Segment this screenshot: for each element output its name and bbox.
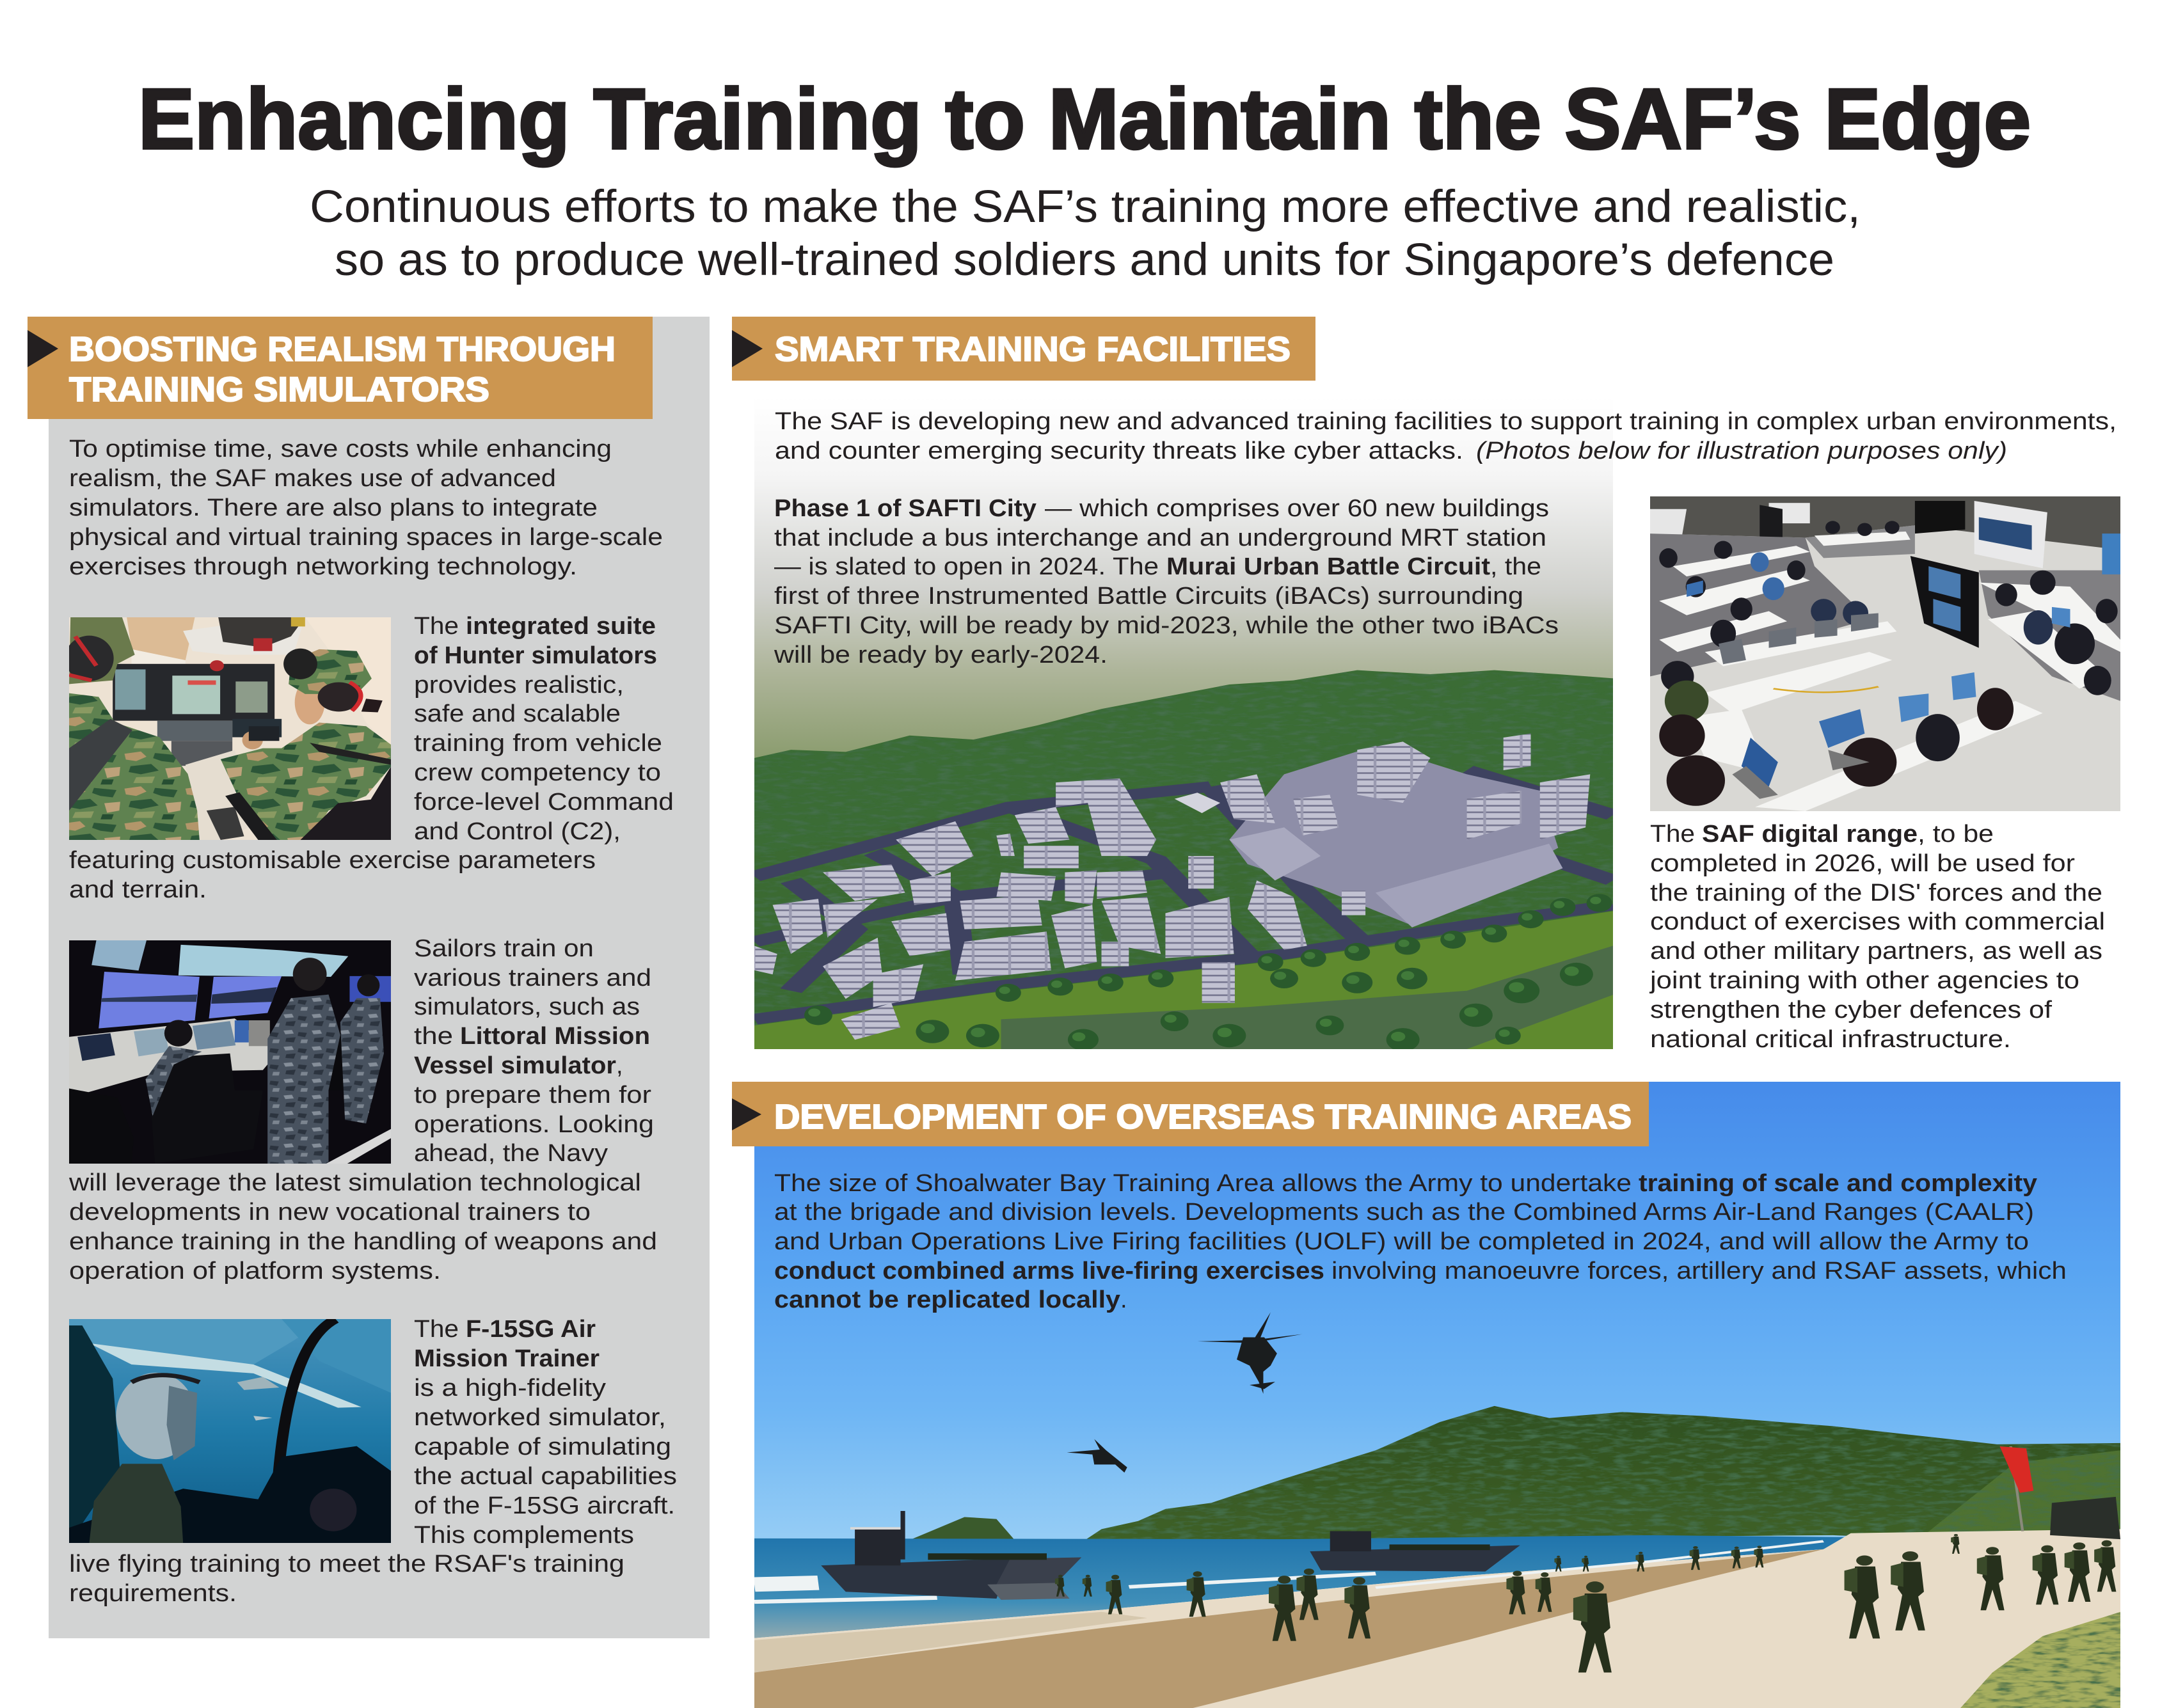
attack helicopter large — [1198, 1312, 1303, 1394]
landing craft centre — [1310, 1531, 1520, 1572]
text: Littoral Mission Vessel simulator: Vessel simulator — [414, 1052, 616, 1079]
text: overseas training areas: at the brigade and division levels. Developments such as the Combined Arms Air-Land Ranges (CAALR) — [774, 1199, 2034, 1226]
text: Phase 1 of SAFTI City: , the — [1490, 553, 1541, 580]
island — [910, 1517, 1015, 1541]
photo: Littoral Mission Vessel simulator — [69, 940, 391, 1164]
text: F-15SG Air Mission Trainer: is a high-fidelity — [414, 1375, 606, 1402]
photo: SAF digital range operations room — [1650, 496, 2120, 811]
text: Littoral Mission Vessel simulator: operations. Looking — [414, 1111, 654, 1138]
text: SAF digital range: joint training with other agencies to — [1649, 967, 2079, 994]
intro paragraph: simulators. There are also plans to integrate — [69, 494, 598, 521]
text: Littoral Mission Vessel simulator: simulators, such as — [414, 993, 640, 1020]
foreground trees — [804, 894, 1612, 1052]
intro paragraph — [69, 436, 663, 580]
crowded right desks zone — [1979, 571, 2120, 701]
attack helicopter small — [1067, 1439, 1127, 1473]
truck — [2050, 1497, 2120, 1539]
text: SAF digital range: strengthen the cyber defences of — [1650, 997, 2053, 1024]
text: Phase 1 of SAFTI City: Phase 1 of SAFTI City — [774, 495, 1037, 522]
soldiers — [1055, 1534, 2116, 1672]
surf foam — [754, 1541, 1823, 1602]
landing craft left — [821, 1511, 1081, 1600]
text: SAF digital range: the training of the DIS' forces and the — [1650, 880, 2102, 906]
text: Phase 1 of SAFTI City: that include a bus interchange and an underground MRT station — [774, 525, 1546, 551]
text: SAF digital range: national critical infrastructure. — [1650, 1026, 2011, 1053]
section header: development of overseas training areas: DEVELOPMENT OF OVERSEAS TRAINING AREAS — [774, 1098, 1632, 1136]
text: F-15SG Air Mission Trainer: networked simulator, — [414, 1404, 666, 1431]
text: SAF digital range — [1649, 821, 2105, 1053]
intro paragraph: exercises through networking technology. — [69, 553, 577, 580]
text: Hunter simulators: and terrain. — [69, 876, 207, 903]
section header: boosting realism — [28, 317, 653, 419]
section header: boosting realism: BOOSTING REALISM THROUGH — [69, 330, 616, 368]
text: F-15SG Air Mission Trainer: capable of simulating — [414, 1434, 671, 1460]
subtitle: Continuous efforts to make the SAF’s training more effective and realistic, — [310, 182, 1861, 232]
text: Hunter simulators: and Control (C2), — [414, 818, 621, 845]
text: F-15SG Air Mission Trainer: live flying training to meet the RSAF's training — [69, 1551, 624, 1578]
roads — [754, 770, 1613, 1019]
text: Phase 1 of SAFTI City: — which comprises over 60 new buildings — [1045, 495, 1549, 522]
text: Phase 1 of SAFTI City — [774, 495, 1559, 668]
text: Littoral Mission Vessel simulator: Littoral Mission — [460, 1023, 650, 1050]
text: F-15SG Air Mission Trainer — [69, 1316, 677, 1607]
text: Littoral Mission Vessel simulator: Sailors train on — [414, 935, 594, 962]
mountain — [1083, 1406, 2120, 1547]
text: Hunter simulators: training from vehicle — [414, 730, 662, 757]
text: smart training facilities intro: (Photos below for illustration purposes only) — [1476, 438, 2007, 464]
text: overseas training areas: and Urban Operations Live Firing facilities (UOLF) will be completed in 2024, and will allow the Army to — [774, 1228, 2029, 1255]
photo: Hunter simulator crew — [69, 617, 391, 840]
panel: boosting realism through training simulators — [28, 317, 710, 1638]
text: Littoral Mission Vessel simulator: various trainers and — [414, 965, 651, 992]
image: SAFTI City aerial render — [754, 460, 1613, 1049]
central building complex — [1175, 734, 1590, 950]
text: Littoral Mission Vessel simulator: enhance training in the handling of weapons and — [69, 1228, 657, 1255]
text: overseas training areas: cannot be replicated locally — [774, 1286, 1120, 1313]
section header: smart training facilities — [732, 317, 1315, 381]
text: Hunter simulators: safe and scalable — [414, 700, 621, 727]
text: Hunter simulators: featuring customisable exercise parameters — [69, 847, 596, 874]
seated people — [1659, 521, 2118, 806]
intro paragraph: To optimise time, save costs while enhancing — [69, 436, 612, 463]
text: Littoral Mission Vessel simulator — [68, 935, 657, 1285]
text: SAF digital range: The — [1650, 821, 1695, 848]
text: overseas training areas: The size of Shoalwater Bay Training Area allows the Army to undertake — [774, 1170, 1632, 1197]
text: overseas training areas: involving manoeuvre forces, artillery and RSAF assets, which — [1331, 1258, 2067, 1285]
text: overseas training areas: . — [1120, 1286, 1127, 1313]
text: Phase 1 of SAFTI City: SAFTI City, will be ready by mid-2023, while the other two iBACs — [774, 612, 1559, 639]
text: Hunter simulators: integrated suite — [466, 613, 656, 640]
title: Enhancing Training to Maintain the SAF’s Edge — [138, 72, 2031, 167]
text: Hunter simulators: crew competency to — [414, 759, 661, 786]
subtitle: so as to produce well-trained soldiers and units for Singapore’s defence — [335, 235, 1834, 285]
beach grass — [1960, 1612, 2120, 1708]
foreground grass and pond — [754, 911, 1613, 1049]
text: Littoral Mission Vessel simulator: will leverage the latest simulation technological — [68, 1169, 641, 1196]
text: F-15SG Air Mission Trainer: F-15SG Air — [466, 1316, 596, 1343]
text: F-15SG Air Mission Trainer: Mission Trainer — [414, 1345, 600, 1372]
text: smart training facilities intro: and counter emerging security threats like cyber attacks. — [775, 438, 1463, 464]
text: overseas training areas — [774, 1170, 2067, 1313]
text: F-15SG Air Mission Trainer: The — [414, 1316, 459, 1343]
text: smart training facilities intro — [775, 408, 2117, 464]
red flag — [1999, 1446, 2033, 1531]
crowded upper-left desks zone — [1650, 534, 1870, 676]
campus ground — [754, 770, 1613, 1049]
text: SAF digital range: and other military partners, as well as — [1650, 938, 2102, 965]
text: F-15SG Air Mission Trainer: requirements. — [69, 1580, 237, 1607]
intro paragraph: realism, the SAF makes use of advanced — [69, 465, 556, 492]
section header: development of overseas training areas — [732, 1082, 1649, 1146]
text: Littoral Mission Vessel simulator: ahead, the Navy — [414, 1140, 608, 1167]
text: Hunter simulators: The — [414, 613, 459, 640]
sea — [754, 1535, 1851, 1638]
text: overseas training areas: conduct combined arms live-firing exercises — [774, 1258, 1324, 1285]
text: Littoral Mission Vessel simulator: the — [414, 1023, 453, 1050]
beach sand — [754, 1529, 2120, 1708]
text: SAF digital range: SAF digital range — [1702, 821, 1918, 848]
text: Phase 1 of SAFTI City: Murai Urban Battle Circuit — [1166, 553, 1490, 580]
text: Littoral Mission Vessel simulator: operation of platform systems. — [69, 1258, 441, 1285]
section header: smart training facilities: SMART TRAINING FACILITIES — [775, 330, 1291, 368]
section header: boosting realism: TRAINING SIMULATORS — [69, 370, 489, 409]
intro paragraph: physical and virtual training spaces in large-scale — [69, 524, 663, 551]
desks — [1659, 532, 2120, 811]
text: F-15SG Air Mission Trainer: of the F-15SG aircraft. — [414, 1492, 675, 1519]
photo: Shoalwater Bay beach landing — [754, 1082, 2120, 1708]
text: Hunter simulators: force-level Command — [414, 789, 674, 816]
forest band — [754, 670, 1613, 860]
text: F-15SG Air Mission Trainer: the actual capabilities — [414, 1463, 677, 1490]
text: SAF digital range: , to be — [1918, 821, 1994, 848]
text: Littoral Mission Vessel simulator: developments in new vocational trainers to — [69, 1199, 591, 1226]
photo: F-15SG Air Mission Trainer — [69, 1319, 391, 1543]
text: Littoral Mission Vessel simulator: , — [616, 1052, 623, 1079]
subtitle — [310, 182, 1861, 285]
text: Phase 1 of SAFTI City: will be ready by early-2024. — [774, 642, 1108, 668]
left building cluster — [754, 779, 1235, 1040]
text: SAF digital range: completed in 2026, will be used for — [1650, 850, 2075, 877]
text: SAF digital range: conduct of exercises with commercial — [1650, 908, 2105, 935]
laptops — [1687, 580, 2070, 799]
text: Hunter simulators — [69, 613, 674, 903]
text: smart training facilities intro: The SAF is developing new and advanced training facilities to support training in complex urban environments, — [775, 408, 2117, 435]
text: Hunter simulators: of Hunter simulators — [414, 642, 657, 669]
text: Littoral Mission Vessel simulator: to prepare them for — [414, 1082, 651, 1109]
text: Phase 1 of SAFTI City: first of three Instrumented Battle Circuits (iBACs) surrounding — [774, 583, 1523, 610]
text: F-15SG Air Mission Trainer: This complements — [414, 1522, 634, 1549]
text: Phase 1 of SAFTI City: — is slated to open in 2024. The — [774, 553, 1159, 580]
text: overseas training areas: training of scale and complexity — [1639, 1170, 2037, 1197]
text: Hunter simulators: provides realistic, — [414, 672, 624, 699]
